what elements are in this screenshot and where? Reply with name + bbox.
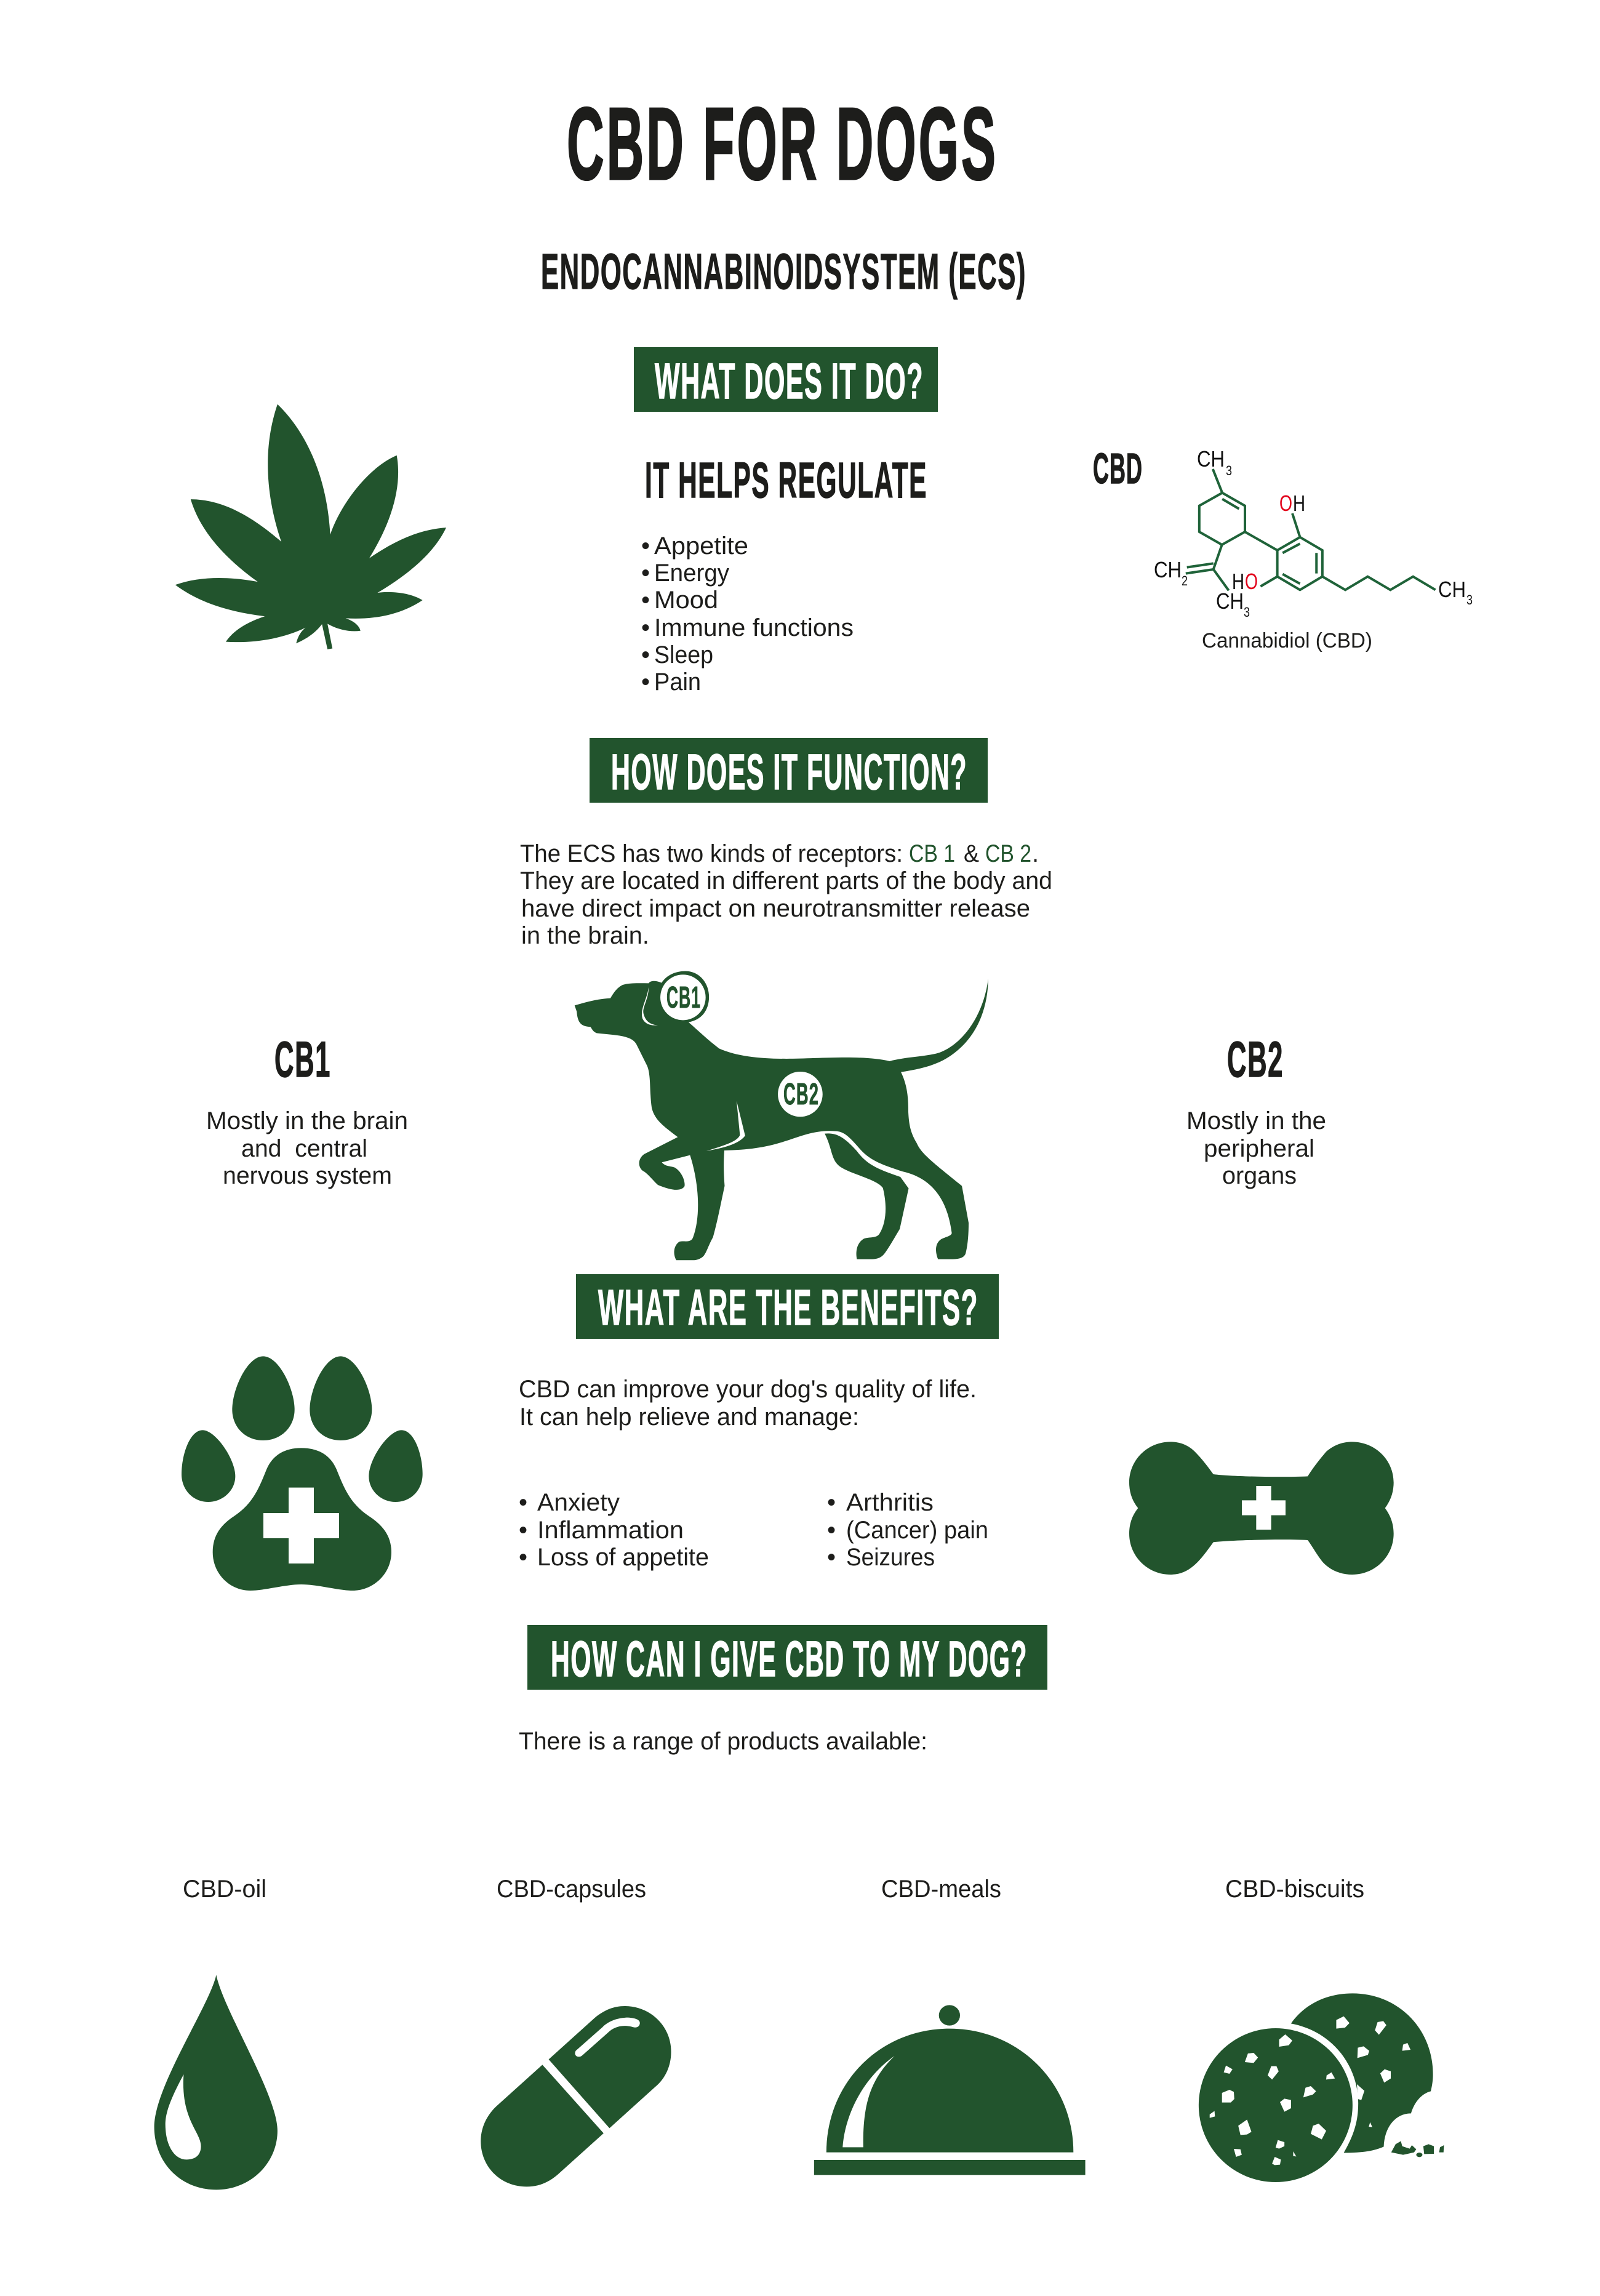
icon: biscuits [1199,1993,1444,2182]
list: regulated functions [641,532,854,696]
text block: benefits intro [519,1376,977,1431]
panel: CB1 [206,1032,408,1189]
list: benefits column two: • [827,1489,836,1516]
list: benefits column two: Arthritis [846,1489,934,1516]
list: benefits column one: Loss of appetite [537,1544,709,1571]
molecule labels [1154,446,1473,620]
text: CB1 location: nervous system [223,1162,392,1189]
icon: dog with receptors [575,971,988,1260]
icon: capsule [481,2006,671,2186]
text block: receptors paragraph: CB 1 [909,840,955,867]
molecule labels: 2 [1182,573,1188,588]
list: regulated functions: Pain [654,668,701,696]
label: CBD-meals: CBD-meals [881,1876,1001,1903]
molecule labels: H [1232,569,1244,594]
list: benefits column one: • [519,1489,527,1516]
list: benefits column two [827,1489,988,1571]
label: CBD-oil: CBD-oil [183,1876,266,1903]
text: CB2 location: Mostly in the [1186,1107,1326,1134]
text block: benefits intro: It can help relieve and manage: [519,1403,859,1431]
icon: cannabis leaf [175,404,446,649]
list: regulated functions: Appetite [654,532,748,560]
molecule labels: O [1245,569,1258,594]
text block: receptors paragraph: & [964,840,979,867]
badge: CB1: CB1 [666,981,701,1014]
label: CBD-biscuits: CBD-biscuits [1225,1876,1364,1903]
heading: CB1: CB1 [274,1032,331,1088]
subtitle: ENDOCANNABINOIDSYSTEM (ECS) [541,244,1026,300]
list: regulated functions: Immune functions [654,614,854,641]
molecule labels: 3 [1244,604,1250,620]
list: regulated functions: • [641,668,650,696]
text block: benefits intro: CBD can improve your dog's quality of life. [519,1376,977,1403]
molecule labels: 3 [1226,463,1232,478]
panel: CB2 [1186,1032,1326,1189]
list: benefits column one: Inflammation [537,1517,684,1544]
molecule labels: CH [1216,588,1244,614]
caption: cannabidiol: Cannabidiol (CBD) [1202,629,1372,652]
list: regulated functions: • [641,641,650,668]
heading: CB2: CB2 [1227,1032,1284,1088]
heading banner: how can I give CBD [527,1625,1047,1690]
molecule labels: O [1279,491,1292,516]
text: range of products: There is a range of products available: [519,1728,927,1755]
badge: CB2: CB2 [783,1078,819,1111]
heading banner: how can I give CBD: HOW CAN I GIVE CBD TO MY DOG? [551,1631,1028,1687]
heading banner: what does it do [634,347,938,412]
text block: it helps regulate [641,452,927,696]
icon: paw with cross [182,1356,423,1591]
label: CBD-capsules: CBD-capsules [497,1876,646,1903]
list: regulated functions: • [641,614,650,641]
dog silhouette [575,971,988,1260]
text block: receptors paragraph [520,840,1052,949]
heading banner: how does it function: HOW DOES IT FUNCTION? [611,744,967,800]
heading banner: what are the benefits: WHAT ARE THE BENEFITS? [598,1280,978,1336]
panel: CBD molecule [1093,444,1473,652]
list: regulated functions: • [641,587,650,614]
text block: receptors paragraph: in the brain. [521,922,649,949]
text: CB1 location: and central [241,1135,367,1162]
icon: meal cloche [814,2005,1086,2175]
text: CB2 location: peripheral [1204,1135,1314,1162]
molecule labels: CH [1154,557,1182,582]
list: regulated functions: Sleep [654,641,713,668]
title: CBD FOR DOGS [567,87,998,201]
list: benefits column two: Seizures [846,1544,935,1571]
list: regulated functions: Energy [654,560,729,587]
list: regulated functions: • [641,560,650,587]
heading banner: how does it function [590,738,988,803]
text: CB2 location [1186,1107,1326,1189]
icon: bone with cross [1129,1442,1394,1575]
list: benefits column two: (Cancer) pain [846,1517,988,1544]
text: CB2 location: organs [1222,1162,1297,1189]
text block: receptors paragraph: CB 2 [985,840,1031,867]
text block: receptors paragraph: The ECS has two kinds of receptors: [520,840,903,867]
text block: receptors paragraph: . [1032,840,1039,867]
text: CB1 location: Mostly in the brain [206,1107,408,1134]
list: benefits column one: • [519,1517,527,1544]
list: benefits column two: • [827,1544,836,1571]
list: regulated functions: • [641,532,650,560]
heading banner: what does it do: WHAT DOES IT DO? [655,353,924,409]
list: benefits column one: • [519,1544,527,1571]
text block: receptors paragraph: They are located in different parts of the body and [520,867,1052,894]
text block: receptors paragraph: have direct impact on neurotransmitter release [521,895,1030,922]
molecule labels: 3 [1466,592,1473,608]
text: CB1 location [206,1107,408,1189]
molecule labels: CH [1197,446,1225,472]
icon: oil drop [154,1975,278,2190]
heading: it helps regulate: IT HELPS REGULATE [645,452,927,508]
list: regulated functions: Mood [654,587,718,614]
molecule labels: H [1293,491,1305,516]
molecule labels: CH [1438,577,1466,602]
chart: cannabidiol structure bonds [1186,469,1436,590]
list: benefits column two: • [827,1517,836,1544]
list: benefits column one: Anxiety [537,1489,620,1516]
heading banner: what are the benefits [576,1274,999,1339]
heading: CBD: CBD [1093,444,1143,492]
list: benefits column one [519,1489,709,1571]
